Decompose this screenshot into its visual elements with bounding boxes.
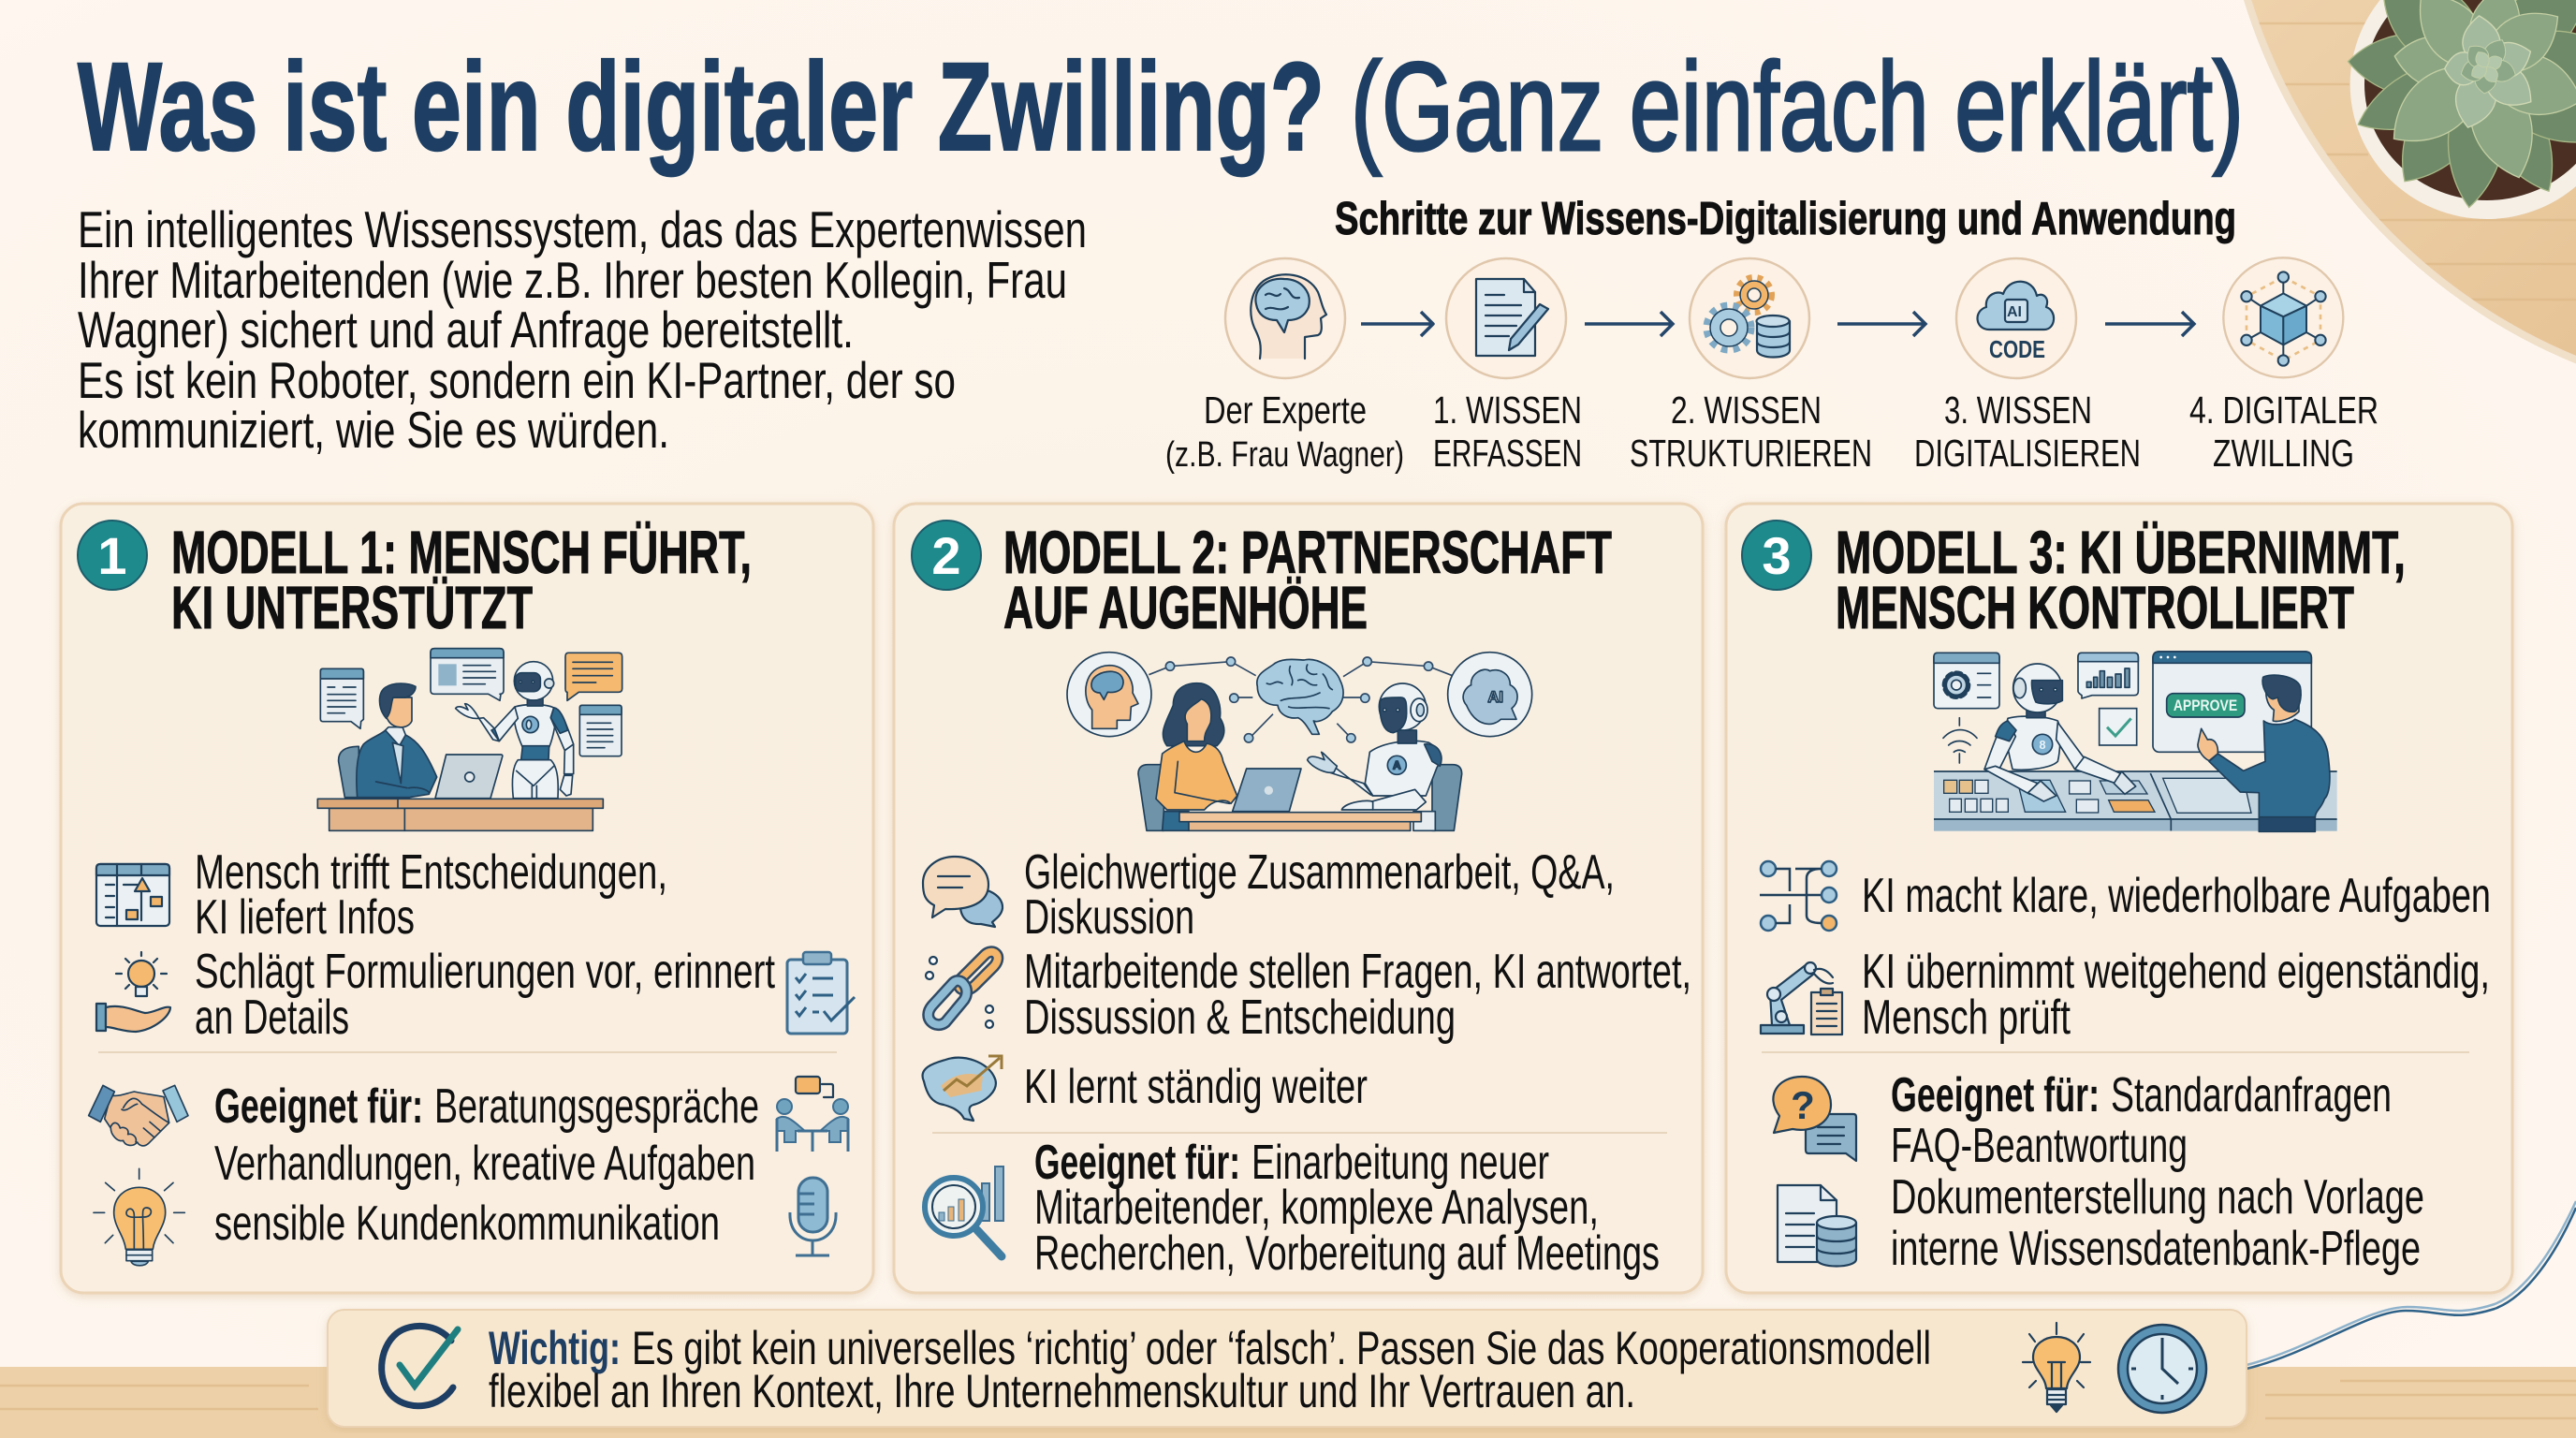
heading xyxy=(1836,519,2406,641)
potted succulent xyxy=(2347,0,2576,219)
desk xyxy=(317,799,603,830)
brain xyxy=(1257,659,1343,734)
pot xyxy=(2350,0,2576,219)
woman xyxy=(1156,683,1237,830)
icon: magnifier with bars xyxy=(925,1167,1003,1256)
callout text: Wichtig: xyxy=(489,1322,621,1374)
intro text: Wagner) sichert und auf Anfrage bereitstellt. xyxy=(78,301,854,359)
bullet: Entscheidungen: Mensch trifft Entscheidungen, xyxy=(195,845,667,900)
number badge xyxy=(78,521,147,590)
bullet: Fragen: Mitarbeitende stellen Fragen, KI antwortet, xyxy=(1024,945,1691,999)
approve window xyxy=(2153,652,2311,752)
icon: question bubble: ? xyxy=(1791,1083,1815,1127)
heading: MODELL 2: PARTNERSCHAFT xyxy=(1003,519,1612,586)
soil xyxy=(2364,0,2576,200)
bullet: eigenständig xyxy=(1761,945,2490,1045)
bullet: Fragen: Dissussion & Entscheidung xyxy=(1024,990,1456,1045)
leaves outer tier xyxy=(2347,0,2576,211)
suitable for block xyxy=(214,1079,759,1251)
cable xyxy=(2247,1201,2576,1369)
card xyxy=(894,504,1703,1293)
heading: MODELL 1: MENSCH FÜHRT, xyxy=(171,519,752,586)
intro text: kommuniziert, wie Sie es würden. xyxy=(78,401,669,459)
step labels: 1. WISSEN xyxy=(1433,389,1582,432)
console xyxy=(1934,771,2337,831)
process flow xyxy=(1165,257,2378,475)
approve window: APPROVE xyxy=(2174,697,2237,714)
wooden table strip xyxy=(0,1367,2576,1438)
number badge: 1 xyxy=(97,526,127,585)
bullet: Aufgaben xyxy=(1760,861,2491,931)
intro text: Ein intelligentes Wissenssystem, das das Expertenwissen xyxy=(78,200,1087,258)
icon: handshake xyxy=(89,1085,188,1146)
suitable for block: Recherchen, Vorbereitung auf Meetings xyxy=(1034,1226,1660,1281)
chair xyxy=(339,746,359,798)
bullet: Formulierungen: Schlägt Formulierungen vor, erinnert xyxy=(195,945,775,999)
bullet: Zusammenarbeit: Diskussion xyxy=(1024,890,1194,945)
step labels: (z.B. Frau Wagner) xyxy=(1165,435,1404,475)
intro text: Es ist kein Roboter, sondern ein KI-Partner, der so xyxy=(78,351,956,409)
card xyxy=(1726,504,2512,1293)
step labels: ERFASSEN xyxy=(1433,432,1582,475)
icon: meeting xyxy=(777,1077,848,1152)
step labels: 2. WISSEN xyxy=(1671,389,1822,432)
panel: Modell 3 xyxy=(1726,504,2512,1293)
icon: planning board xyxy=(96,864,169,926)
suitable for block: Mitarbeitender, komplexe Analysen, xyxy=(1034,1181,1599,1235)
step: wissen digitalisieren: AI xyxy=(2007,304,2022,320)
heading: AUF AUGENHÖHE xyxy=(1003,574,1368,641)
step labels: STRUKTURIEREN xyxy=(1630,432,1872,475)
step: wissen erfassen xyxy=(1446,258,1566,378)
robot: 8 xyxy=(2039,739,2046,752)
suitable for block: FAQ-Beantwortung xyxy=(1891,1119,2188,1173)
robot xyxy=(1984,664,2136,801)
suitable for block: Standardanfragen xyxy=(2111,1068,2392,1123)
icon: check circle xyxy=(382,1326,458,1406)
step labels: DIGITALISIEREN xyxy=(1914,432,2141,475)
step labels: 3. WISSEN xyxy=(1944,389,2092,432)
settings window xyxy=(1934,653,1999,709)
callout: Wichtig xyxy=(328,1310,2247,1427)
title: Was ist ein digitaler Zwilling? xyxy=(78,37,1325,177)
icon: microphone xyxy=(790,1178,836,1255)
icon: robot arm with clipboard xyxy=(1761,962,1842,1034)
robot xyxy=(456,662,574,799)
icon: chat bubbles xyxy=(923,857,1003,927)
callout text: flexibel an Ihren Kontext, Ihre Unternehmenskultur und Ihr Vertrauen an. xyxy=(489,1365,1635,1417)
panel: Modell 2 xyxy=(894,504,1703,1293)
suitable for block: Geeignet für: xyxy=(214,1079,423,1134)
bullet: Zusammenarbeit: Gleichwertige Zusammenarbeit, Q&A, xyxy=(1024,845,1615,900)
heading: MENSCH KONTROLLIERT xyxy=(1836,574,2354,641)
icon: lightbulb xyxy=(2023,1323,2090,1412)
icon: lightbulb xyxy=(94,1168,184,1266)
step: wissen digitalisieren: CODE xyxy=(1989,335,2045,363)
chart bubble xyxy=(2078,653,2138,698)
suitable for block: Verhandlungen, kreative Aufgaben xyxy=(214,1137,755,1191)
icon: question bubble xyxy=(1773,1077,1856,1161)
step labels xyxy=(1165,389,2378,475)
icon: brain with growth arrow xyxy=(923,1056,1002,1121)
icon: clipboard xyxy=(787,952,855,1034)
leaves inner tier xyxy=(2445,14,2541,133)
suitable for block: Einarbeitung neuer xyxy=(1251,1136,1549,1190)
arrow xyxy=(2105,312,2194,336)
orange gear xyxy=(1737,278,1771,312)
wooden round table top right xyxy=(2244,0,2576,363)
icon: clock xyxy=(2118,1325,2206,1413)
title: (Ganz einfach erklärt) xyxy=(1351,37,2244,177)
illustration: human and robot sharing knowledge xyxy=(1067,653,1532,830)
icon: chain link xyxy=(926,952,998,1028)
step labels: ZWILLING xyxy=(2213,432,2354,475)
heading xyxy=(171,519,752,641)
process heading: Schritte zur Wissens-Digitalisierung und Anwendung xyxy=(1335,194,2236,244)
arrow xyxy=(1837,312,1925,336)
bullet: Fragen xyxy=(926,945,1691,1045)
laptop xyxy=(1233,769,1301,812)
step: der Experte xyxy=(1225,258,1345,378)
human head circle xyxy=(1067,653,1151,737)
divider xyxy=(98,1051,837,1053)
rosette centre xyxy=(2458,35,2518,95)
robot xyxy=(1308,683,1442,830)
chat documents xyxy=(320,649,622,756)
wifi xyxy=(1943,718,1977,763)
icon: flow diagram xyxy=(1760,861,1837,931)
suitable for block xyxy=(1034,1136,1660,1281)
man xyxy=(357,683,437,798)
illustration: human at desk with robot xyxy=(317,649,622,830)
number badge: 3 xyxy=(1762,526,1792,585)
step labels: Der Experte xyxy=(1204,389,1367,432)
bullet: Formulierungen: an Details xyxy=(195,990,349,1045)
bullet: Formulierungen xyxy=(96,945,855,1045)
intro text xyxy=(78,200,1087,459)
database xyxy=(1756,315,1790,358)
divider xyxy=(932,1132,1667,1134)
number badge xyxy=(1742,521,1811,590)
callout box xyxy=(328,1310,2247,1427)
blue gear xyxy=(1707,306,1750,349)
table xyxy=(1179,813,1421,830)
number badge: 2 xyxy=(931,526,961,585)
icon: bulb over hand xyxy=(96,952,170,1032)
suitable for block: Geeignet für: xyxy=(1891,1068,2100,1123)
bullet: lernt: KI lernt ständig weiter xyxy=(1024,1060,1368,1114)
callout text: Es gibt kein universelles ‘richtig’ oder ‘falsch’. Passen Sie das Kooperationsmodell xyxy=(632,1322,1931,1374)
man xyxy=(2198,675,2330,831)
callout text xyxy=(489,1322,1931,1417)
leaves middle tier xyxy=(2376,0,2576,186)
chairs xyxy=(1138,765,1164,830)
arrow xyxy=(1585,312,1673,336)
suitable for block: sensible Kundenkommunikation xyxy=(214,1196,720,1251)
network xyxy=(1149,662,1453,738)
illustration: robot at console, human approves xyxy=(1934,652,2337,831)
step labels: 4. DIGITALER xyxy=(2189,389,2378,432)
bullet: lernt xyxy=(923,1056,1368,1121)
number badge xyxy=(912,521,981,590)
step: digitaler zwilling xyxy=(2223,257,2343,377)
bullet: Entscheidungen: KI liefert Infos xyxy=(195,890,415,945)
divider xyxy=(1762,1051,2469,1053)
suitable for block xyxy=(1891,1068,2424,1276)
suitable for block: Beratungsgespräche xyxy=(434,1079,759,1134)
icon: document and database xyxy=(1778,1185,1856,1266)
bullet: eigenständig: Mensch prüft xyxy=(1862,990,2071,1045)
panel: Modell 1 xyxy=(61,504,873,1293)
intro text: Ihrer Mitarbeitenden (wie z.B. Ihrer besten Kollegin, Frau xyxy=(78,251,1067,309)
laptop xyxy=(435,755,503,799)
bullet: Entscheidungen xyxy=(96,845,667,945)
AI brain circle: AI xyxy=(1487,688,1503,706)
check window xyxy=(2100,709,2137,745)
card xyxy=(61,504,873,1293)
step: wissen digitalisieren xyxy=(1956,258,2076,378)
bullet: Zusammenarbeit xyxy=(923,845,1615,945)
suitable for block: Geeignet für: xyxy=(1034,1136,1240,1190)
heading: KI UNTERSTÜTZT xyxy=(171,574,533,641)
heading xyxy=(1003,519,1612,641)
robot: A xyxy=(1393,759,1401,772)
AI brain circle xyxy=(1448,653,1532,737)
step: wissen strukturieren xyxy=(1690,258,1809,378)
arrow xyxy=(1361,312,1433,336)
